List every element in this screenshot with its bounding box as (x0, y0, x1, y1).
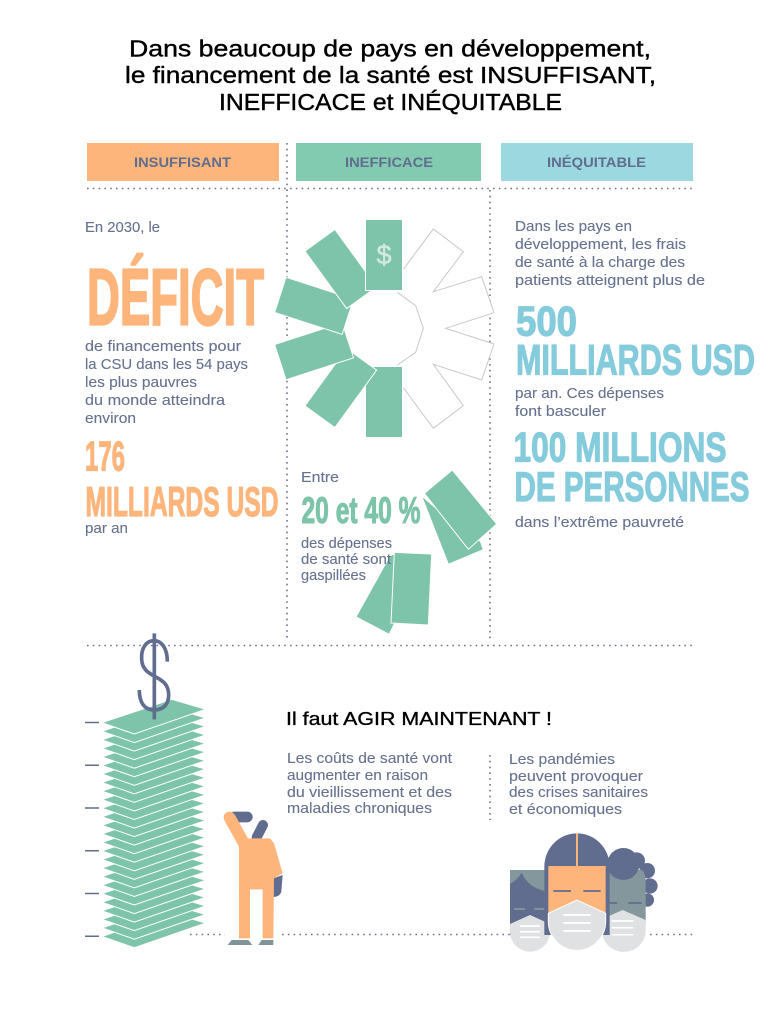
chart: wheel of ten banknotes (275, 220, 494, 438)
body text: font basculer (515, 404, 606, 420)
text block: pandemies: peuvent provoquer (509, 769, 643, 785)
icon: dollar on note: $ (376, 240, 392, 270)
body text: gaspillees: des dépenses (301, 536, 392, 552)
title: le financement de la santé est INSUFFISANT, (125, 62, 656, 88)
title (125, 36, 656, 115)
intro text (515, 219, 705, 289)
icon: falling banknotes (357, 470, 497, 634)
scale ticks (85, 722, 99, 936)
icon: person looking up (224, 812, 283, 945)
body text: deficit: les plus pauvres (85, 375, 197, 391)
text block: couts de sante: augmenter en raison (287, 768, 428, 784)
header: inequitable (501, 143, 693, 181)
body text: deficit: la CSU dans les 54 pays (85, 357, 248, 373)
text block: pandemies: des crises sanitaires (509, 785, 648, 801)
intro text: En 2030, le (85, 220, 160, 236)
heading: agir maintenant: Il faut AGIR MAINTENANT ! (286, 709, 552, 729)
body text: gaspillees (301, 536, 392, 584)
body text: deficit: environ (85, 411, 136, 427)
text block: couts de sante (287, 751, 452, 817)
panel: insuffisant (85, 220, 278, 537)
body text: par an. Ces dépenses (515, 386, 664, 402)
title: INEFFICACE et INÉQUITABLE (219, 89, 562, 115)
icon: large dollar sign (139, 633, 169, 719)
header: inefficace (296, 143, 481, 181)
headline: 20 et 40 %: 20 et 40 % (302, 490, 420, 531)
intro text: Dans les pays en (515, 219, 632, 235)
outlined banknotes (397, 229, 494, 428)
header: inequitable: INÉQUITABLE (547, 154, 646, 170)
body text: deficit (85, 339, 248, 427)
body text (515, 386, 664, 420)
text block: couts de sante: maladies chroniques (287, 801, 432, 817)
body text: gaspillees: gaspillées (301, 568, 366, 584)
header: insuffisant (87, 143, 279, 181)
text block: couts de sante: Les coûts de santé vont (287, 751, 452, 767)
banknote sheets (102, 699, 206, 948)
intro text: de santé à la charge des (515, 255, 685, 271)
number: 176: 176 (85, 432, 125, 480)
intro text: patients atteignent plus de (515, 273, 705, 289)
green banknotes (275, 220, 402, 438)
body text: gaspillees: de santé sont (301, 552, 391, 568)
header: insuffisant: INSUFFISANT (134, 154, 231, 170)
header: inefficace: INEFFICACE (345, 154, 433, 170)
panel: inequitable (514, 219, 755, 531)
icon: stack of banknotes (85, 633, 206, 948)
left person (510, 870, 550, 952)
panel: inefficace text (301, 470, 420, 531)
unit: milliards usd: MILLIARDS USD (86, 478, 278, 525)
center person (544, 833, 610, 950)
body text: deficit: du monde atteindra (85, 393, 226, 409)
text block: couts de sante: du vieillissement et des (287, 785, 452, 801)
caption: par an: par an (85, 521, 128, 537)
headline: deficit: DÉFICIT (87, 253, 264, 342)
right person (602, 848, 658, 952)
body text: deficit: de financements pour (85, 339, 241, 355)
title: Dans beaucoup de pays en développement, (129, 36, 651, 62)
body text: dans l’extrême pauvreté (515, 515, 684, 531)
number: 500: 500 (516, 298, 577, 344)
intro text: développement, les frais (515, 237, 686, 253)
text block: pandemies: Les pandémies (509, 752, 615, 768)
intro text: Entre (301, 470, 339, 486)
text block: pandemies: et économiques (509, 802, 622, 818)
icon: three people with masks (510, 833, 658, 952)
text block: pandemies (509, 752, 648, 818)
